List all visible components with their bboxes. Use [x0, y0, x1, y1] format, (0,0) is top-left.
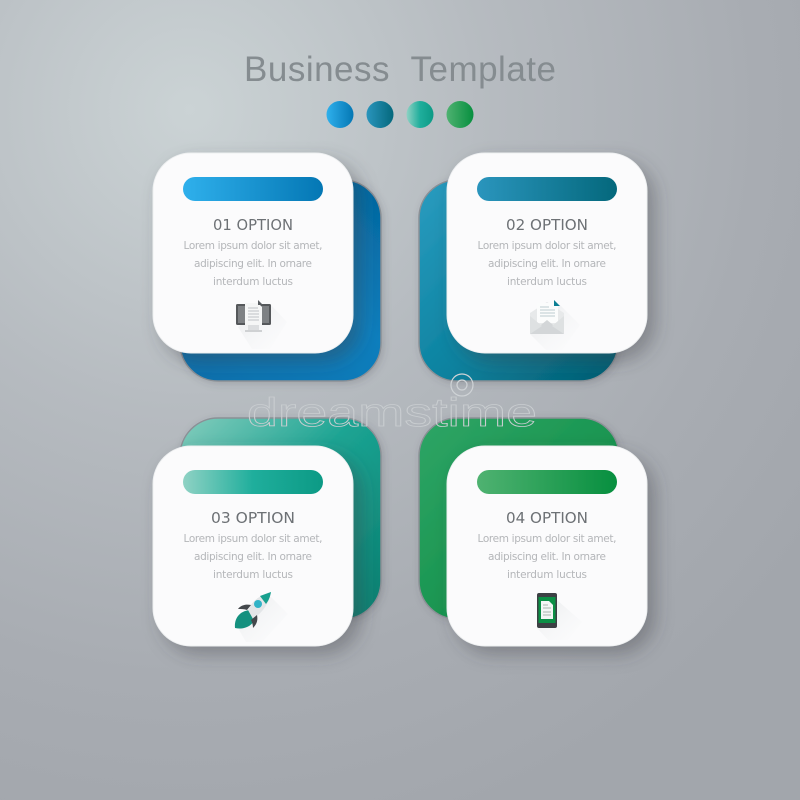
body text 3: adipiscing elit. In ornare — [194, 551, 312, 563]
card: option 4 — [447, 446, 647, 646]
card: option 1 — [153, 153, 353, 353]
back panel: option 2 — [419, 180, 618, 381]
icon: desktop monitor with document — [236, 300, 287, 349]
heading 3: 03 OPTION — [211, 509, 295, 527]
watermark: dreamstime — [247, 391, 537, 435]
body text 2: interdum luctus — [507, 276, 587, 288]
back panel: option 1 — [180, 180, 381, 381]
title: Business Template — [244, 50, 556, 89]
progress dots — [326, 101, 474, 128]
body text 2: Lorem ipsum dolor sit amet, — [478, 240, 616, 252]
header bar 3 — [183, 470, 323, 494]
body text 4 — [478, 533, 616, 581]
body text 2: adipiscing elit. In ornare — [488, 258, 606, 270]
card: option 3 — [153, 446, 353, 646]
card: option 2 — [447, 153, 647, 353]
heading 4: 04 OPTION — [506, 509, 588, 527]
body text 3: interdum luctus — [213, 569, 293, 581]
header bar 1 — [183, 177, 323, 201]
body text 3 — [184, 533, 322, 581]
watermark — [247, 374, 537, 435]
body text 1: adipiscing elit. In ornare — [194, 258, 312, 270]
heading 1: 01 OPTION — [213, 216, 293, 234]
header bar 4 — [477, 470, 617, 494]
body text 4: interdum luctus — [507, 569, 587, 581]
icon: envelope with letter — [530, 300, 580, 350]
body text 2 — [478, 240, 616, 288]
icon: rocket — [235, 592, 288, 642]
body text 1 — [184, 240, 322, 288]
body text 1: Lorem ipsum dolor sit amet, — [184, 240, 322, 252]
header bar 2 — [477, 177, 617, 201]
body text 1: interdum luctus — [213, 276, 293, 288]
heading 2: 02 OPTION — [506, 216, 588, 234]
back panel: option 3 — [180, 418, 381, 619]
body text 4: adipiscing elit. In ornare — [488, 551, 606, 563]
icon: smartphone with document — [537, 593, 582, 640]
back panel: option 4 — [419, 418, 619, 619]
body text 4: Lorem ipsum dolor sit amet, — [478, 533, 616, 545]
body text 3: Lorem ipsum dolor sit amet, — [184, 533, 322, 545]
